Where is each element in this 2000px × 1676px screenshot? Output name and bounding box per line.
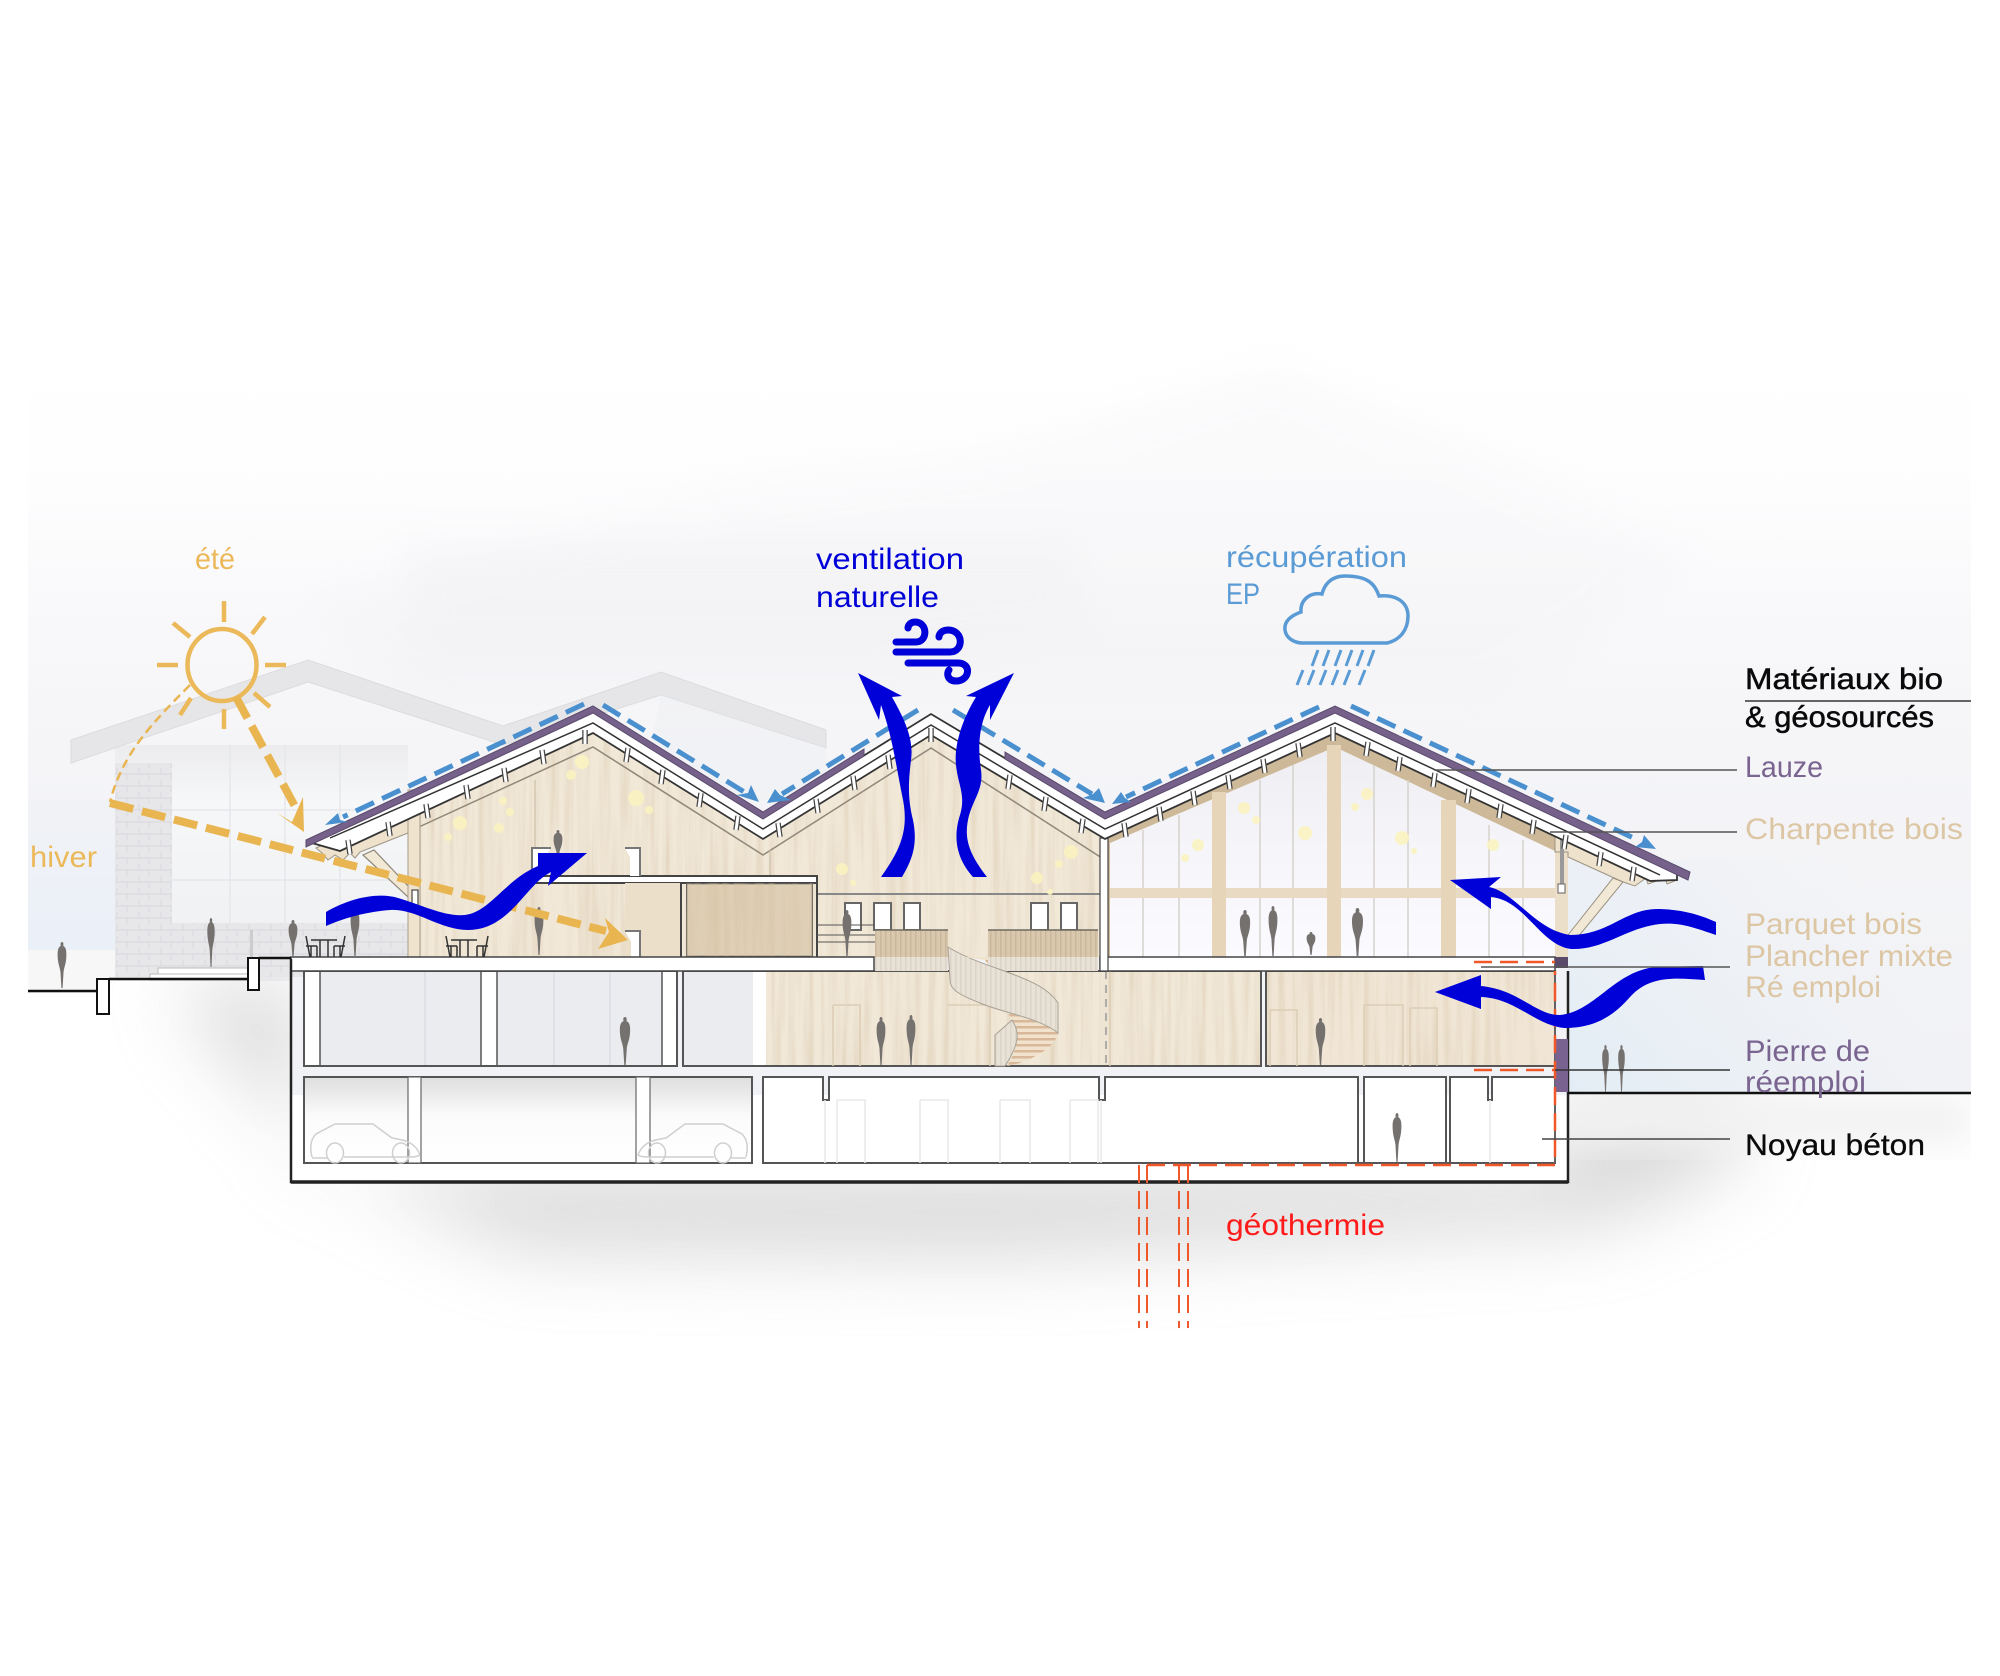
label: hiver: hiver xyxy=(30,841,97,874)
icon: wind xyxy=(896,622,968,681)
legend: Parquet bois, Plancher mixte, Ré emploi: Parquet bois xyxy=(1745,908,1922,941)
winter solar path xyxy=(110,685,628,949)
roof slate right xyxy=(1005,706,1690,880)
icon: parked car left xyxy=(311,1124,420,1163)
legend: Noyau béton: Noyau béton xyxy=(1745,1129,1925,1162)
label: ventilation naturelle: naturelle xyxy=(816,581,939,614)
wood interior, left and centre hall xyxy=(408,733,1105,957)
upper mezzanine and rooms xyxy=(532,848,817,957)
label: récupération EP xyxy=(1226,541,1407,611)
rainwater arrow heads xyxy=(325,785,1656,849)
roof slate left xyxy=(306,706,864,847)
label: ventilation naturelle: ventilation xyxy=(816,543,964,576)
legend: Parquet bois, Plancher mixte, Ré emploi xyxy=(1481,908,1953,1004)
section diagram xyxy=(28,536,1971,1328)
right hall glazing xyxy=(1105,733,1568,957)
legend: Parquet bois, Plancher mixte, Ré emploi: Ré emploi xyxy=(1745,971,1881,1004)
legend: Charpente bois: Charpente bois xyxy=(1745,813,1963,846)
ventilation arrow: centre left xyxy=(858,673,915,877)
label: récupération EP: EP xyxy=(1226,578,1260,611)
sun icon xyxy=(157,601,286,729)
left overhang and strut xyxy=(316,790,420,957)
label: été: été xyxy=(195,543,235,576)
ventilation arrow: right upper xyxy=(1450,877,1716,949)
centre windows xyxy=(845,903,1077,930)
people silhouettes xyxy=(58,830,1625,1162)
floor slabs and balustrades xyxy=(291,838,1555,971)
icon: parked car right xyxy=(638,1124,747,1163)
label: ventilation naturelle xyxy=(816,543,964,614)
level two rooms xyxy=(304,971,1555,1066)
ventilation arrow: right lower xyxy=(1435,966,1705,1028)
mountain fog backdrop xyxy=(28,363,1971,1095)
ventilation arrow: left terrace xyxy=(326,853,587,930)
terrace tables and chairs xyxy=(306,936,488,957)
right overhang and strut xyxy=(1555,830,1677,937)
basement rooms xyxy=(304,1077,1555,1163)
reused stone patches xyxy=(1555,957,1568,1092)
legend heading: & géosourcés xyxy=(1745,701,1934,734)
legend: Pierre de réemploi: Pierre de xyxy=(1745,1035,1870,1068)
label: récupération EP: récupération xyxy=(1226,541,1407,574)
building outer shell xyxy=(291,959,1568,1182)
ghost building behind terrace xyxy=(71,660,826,977)
spiral stair xyxy=(948,947,1058,1066)
geothermal pipes xyxy=(1139,962,1555,1328)
label: géothermie: géothermie xyxy=(1226,1209,1385,1242)
light dots xyxy=(444,755,1499,895)
roof structure xyxy=(306,706,1690,881)
rainwater dashed arrows xyxy=(343,704,1640,841)
icon: rain cloud xyxy=(1285,576,1408,685)
legend heading: Matériaux bio xyxy=(1745,663,1943,696)
legend heading xyxy=(1745,663,1971,734)
legend: Pierre de réemploi xyxy=(1555,1035,1870,1099)
legend: Lauze: Lauze xyxy=(1745,751,1823,784)
ground and terrace section xyxy=(28,930,1971,1093)
ground shadow xyxy=(28,977,1960,1284)
ventilation arrow: centre right xyxy=(956,673,1014,877)
legend: Parquet bois, Plancher mixte, Ré emploi: Plancher mixte xyxy=(1745,940,1953,973)
summer solar arrow xyxy=(236,697,304,832)
legend: Pierre de réemploi: réemploi xyxy=(1745,1066,1866,1099)
